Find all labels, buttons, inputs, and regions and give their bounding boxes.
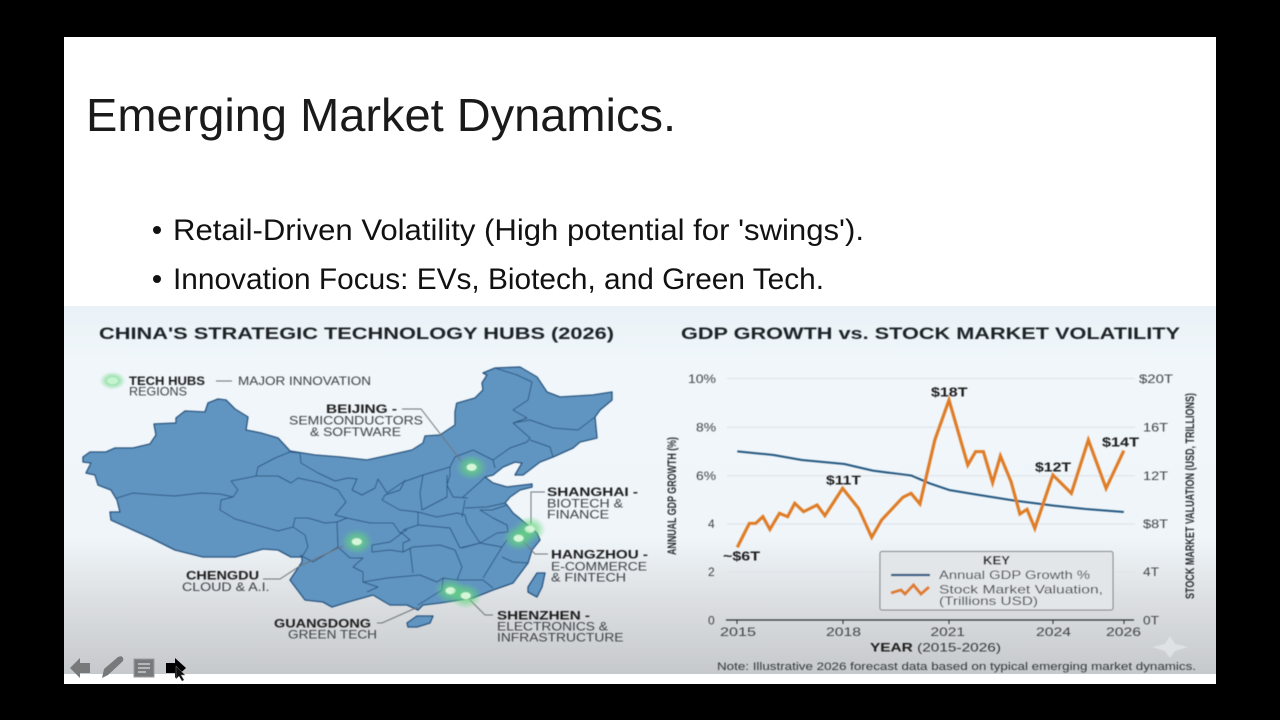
right axis ticks: $8T (1143, 517, 1169, 531)
x axis title: YEAR (2015-2026) (870, 640, 1001, 654)
grid lines and axis (726, 378, 1135, 624)
key: Stock Market Valuation, (939, 582, 1103, 596)
panel: China technology hubs map (83, 324, 648, 644)
left axis ticks: 8% (696, 420, 716, 434)
label: Hangzhou: & FINTECH (551, 570, 626, 584)
data labels: $18T (931, 386, 968, 400)
data labels (723, 386, 1139, 564)
right axis ticks: 0T (1143, 614, 1160, 628)
label: Hangzhou: HANGZHOU - (551, 548, 648, 562)
left axis ticks (688, 372, 716, 628)
label: Shanghai: BIOTECH & (547, 496, 623, 510)
presentation toolbar (70, 656, 186, 681)
key (880, 552, 1113, 610)
right axis ticks: $20T (1139, 372, 1174, 386)
icon: notes (134, 659, 154, 677)
label: Guangdong (274, 616, 377, 642)
label: Shenzhen (497, 608, 624, 644)
left axis ticks: 6% (696, 469, 716, 483)
title: Emerging Market Dynamics. (86, 89, 676, 141)
data labels: ~$6T (723, 550, 760, 564)
key: (Trillions USD) (939, 594, 1038, 608)
infographic panel background (64, 306, 1216, 674)
label: Beijing (289, 402, 423, 439)
label: Hangzhou: E-COMMERCE (551, 560, 647, 574)
label: Chengdu: CHENGDU (186, 568, 259, 582)
footnote: Note: Illustrative 2026 forecast data based on typical emerging market dynamics. (717, 661, 1196, 673)
x axis years: 2015 (720, 625, 756, 639)
label: Beijing: SEMICONDUCTORS (289, 414, 423, 428)
heading: chart: GDP GROWTH vs. STOCK MARKET VOLATILITY (681, 324, 1181, 343)
map of China (83, 367, 612, 627)
label: Beijing: & SOFTWARE (310, 425, 401, 439)
icon: forward arrow with cursor (166, 658, 186, 681)
data labels: $14T (1102, 436, 1139, 450)
right axis title: STOCK MARKET VALUATION (USD, TRILLIONS) (1183, 393, 1197, 599)
GDP growth line (737, 451, 1124, 512)
left axis title: ANNUAL GDP GROWTH (%) (665, 437, 679, 555)
x axis years: 2024 (1036, 625, 1071, 639)
watermark star (1152, 636, 1188, 658)
hub markers (100, 372, 546, 609)
bullet list: Retail-Driven Volatility (High potential for 'swings'). (173, 214, 864, 247)
label: Beijing: BEIJING - (326, 402, 397, 416)
bullet list: Innovation Focus: EVs, Biotech, and Green Tech. (173, 263, 824, 296)
label: Shanghai: FINANCE (547, 508, 609, 522)
x axis years: 2026 (1106, 625, 1141, 639)
x axis years: 2021 (930, 625, 965, 639)
label: Shanghai: SHANGHAI - (547, 485, 638, 499)
left axis ticks: 10% (688, 372, 716, 386)
left axis ticks: 2 (708, 565, 715, 579)
label: Hangzhou (551, 548, 648, 584)
legend: tech hubs: REGIONS (129, 384, 187, 398)
legend: tech hubs: MAJOR INNOVATION (238, 374, 371, 388)
legend: tech hubs: TECH HUBS (129, 374, 205, 388)
label: Chengdu (182, 568, 270, 594)
data labels: $11T (826, 474, 861, 488)
x axis years: 2018 (826, 625, 861, 639)
label: Shenzhen: SHENZHEN - (497, 608, 590, 622)
left axis ticks: 4 (708, 517, 715, 531)
panel: GDP vs stock market chart (665, 324, 1197, 673)
right axis ticks: 12T (1143, 469, 1169, 483)
label: Shenzhen: INFRASTRUCTURE (497, 630, 624, 644)
label: Shanghai (547, 485, 638, 522)
right axis ticks (1139, 372, 1174, 628)
right axis ticks: 4T (1143, 565, 1160, 579)
bullet list (153, 214, 864, 296)
leader lines (216, 381, 548, 623)
heading: map: CHINA'S STRATEGIC TECHNOLOGY HUBS (2026) (99, 324, 614, 343)
label: Guangdong: GREEN TECH (288, 628, 377, 642)
label: Shenzhen: ELECTRONICS & (497, 620, 608, 634)
label: Chengdu: CLOUD & A.I. (182, 580, 270, 594)
key: KEY (983, 554, 1010, 568)
icon: pencil (102, 656, 123, 678)
stock valuation line (737, 400, 1124, 547)
right axis ticks: 16T (1143, 420, 1169, 434)
legend: tech hubs (129, 374, 371, 398)
label: Guangdong: GUANGDONG (274, 616, 371, 630)
icon: back arrow (70, 658, 90, 678)
key: Annual GDP Growth % (939, 568, 1090, 582)
data labels: $12T (1035, 460, 1071, 474)
left axis ticks: 0 (708, 614, 715, 628)
x axis years (720, 625, 1141, 639)
